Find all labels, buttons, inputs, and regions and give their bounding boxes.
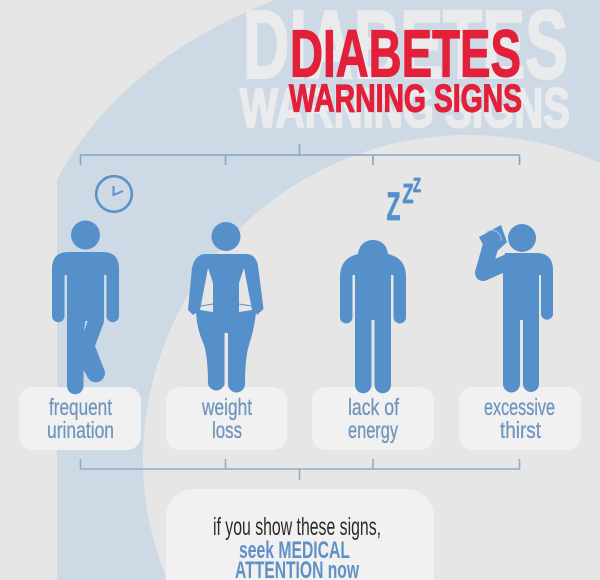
label: weight loss (166, 387, 287, 450)
label: excessive thirst: excessive (484, 394, 555, 420)
label: frequent urination: urination (47, 417, 114, 443)
callout panel (166, 489, 434, 580)
label: weight loss: loss (212, 417, 242, 443)
figure: frequent urination (52, 220, 119, 394)
top bracket (80, 144, 520, 165)
ghost title (240, 0, 570, 139)
icon: glass (479, 225, 507, 258)
title (240, 0, 570, 139)
label: excessive thirst: thirst (500, 417, 541, 443)
bottom bracket (80, 459, 520, 480)
red title: WARNING SIGNS (289, 78, 522, 120)
icon: clock (96, 176, 132, 212)
icon: sleeping Zs: Z (386, 185, 400, 229)
label: excessive thirst (459, 387, 581, 450)
label: lack of energy: energy (348, 417, 398, 443)
callout text (213, 513, 381, 580)
icon: sleeping Zs (386, 175, 421, 229)
label: lack of energy: lack of (348, 394, 399, 420)
callout text: if you show these signs, (213, 513, 381, 541)
label: weight loss: weight (201, 394, 252, 420)
callout text: seek MEDICAL (239, 537, 350, 564)
icon: sleeping Zs: Z (413, 175, 421, 197)
label: frequent urination: frequent (49, 394, 112, 420)
background inner circle (143, 135, 600, 580)
label: frequent urination (19, 387, 141, 450)
hand outline (487, 230, 501, 241)
leg gap (84, 321, 88, 332)
figure: lack of energy (340, 240, 406, 393)
pocket lines (200, 304, 252, 306)
icon: sleeping Zs: Z (402, 178, 414, 209)
figure: excessive thirst (479, 224, 553, 392)
raised arm (483, 241, 508, 273)
label: lack of energy (312, 387, 434, 450)
red title (289, 16, 522, 120)
figure: weight loss (188, 222, 264, 392)
